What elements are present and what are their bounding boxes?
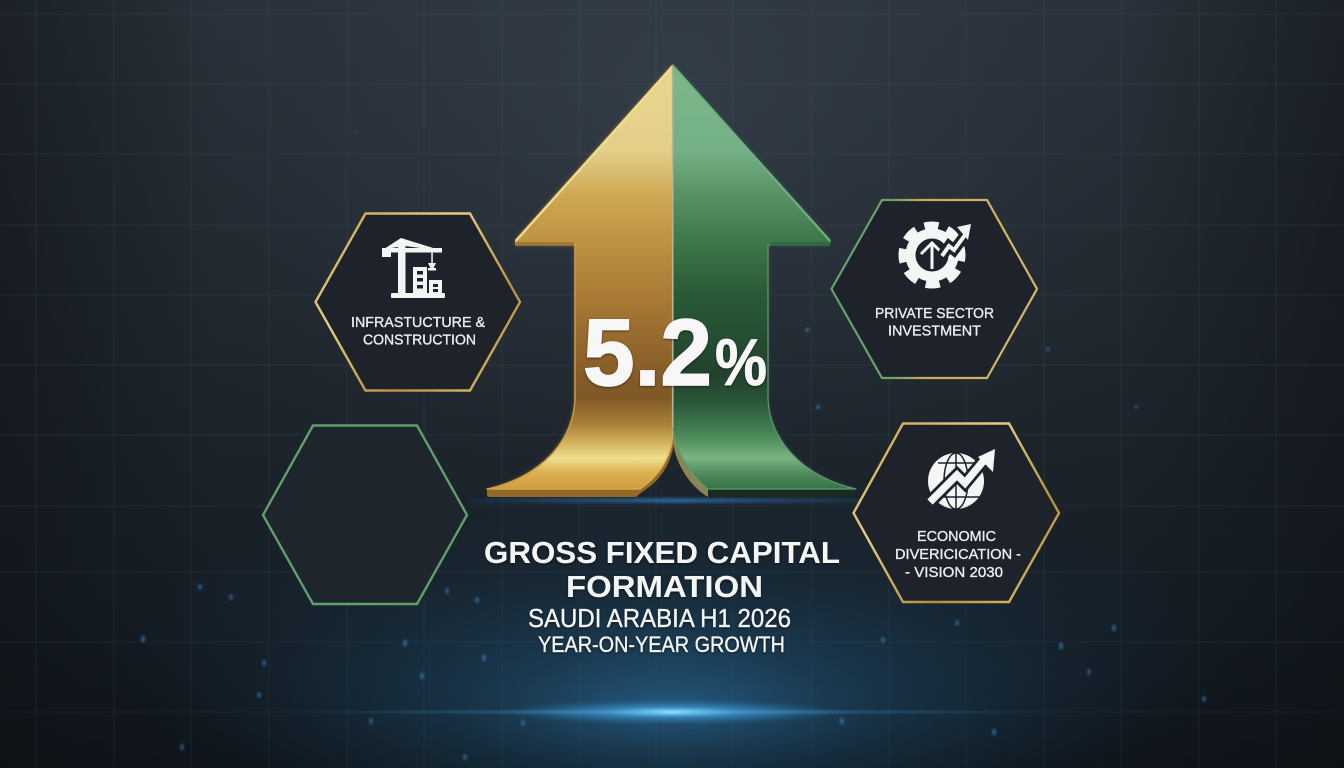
title block: FORMATION <box>566 569 763 604</box>
panel: infrastructure and construction: CONSTRUCTION <box>363 332 476 348</box>
title block <box>484 535 840 657</box>
title block: YEAR-ON-YEAR GROWTH <box>538 632 785 657</box>
panel: private sector investment: INVESTMENT <box>888 322 981 340</box>
green half of arrow <box>673 65 856 497</box>
title block: SAUDI ARABIA H1 2026 <box>528 603 791 633</box>
panel: economic diversification vision 2030: ECONOMIC <box>917 528 996 545</box>
panel: private sector investment <box>832 200 1037 378</box>
growth figure 5.2%: 5.2 <box>583 300 712 406</box>
panel: economic diversification vision 2030 <box>854 424 1059 602</box>
icon: tower crane with buildings <box>382 238 445 298</box>
panel: economic diversification vision 2030: - VISION 2030 <box>905 564 1003 581</box>
panel: empty green hexagon <box>263 426 467 604</box>
central up arrow, gold and green halves <box>470 65 875 503</box>
panel: infrastructure and construction: INFRASTUCTURE & <box>351 314 485 331</box>
panel: private sector investment: PRIVATE SECTOR <box>875 305 994 322</box>
growth figure 5.2%: % <box>715 325 767 399</box>
panel: economic diversification vision 2030: DIVERICICATION - <box>895 546 1021 563</box>
blue base line under arrow <box>470 498 875 503</box>
title block: GROSS FIXED CAPITAL <box>484 535 840 570</box>
panel: infrastructure and construction <box>316 214 520 390</box>
icon: globe with rising arrow <box>928 449 995 509</box>
gold half of arrow <box>487 65 674 497</box>
icon: gear with growth arrows <box>896 219 971 291</box>
